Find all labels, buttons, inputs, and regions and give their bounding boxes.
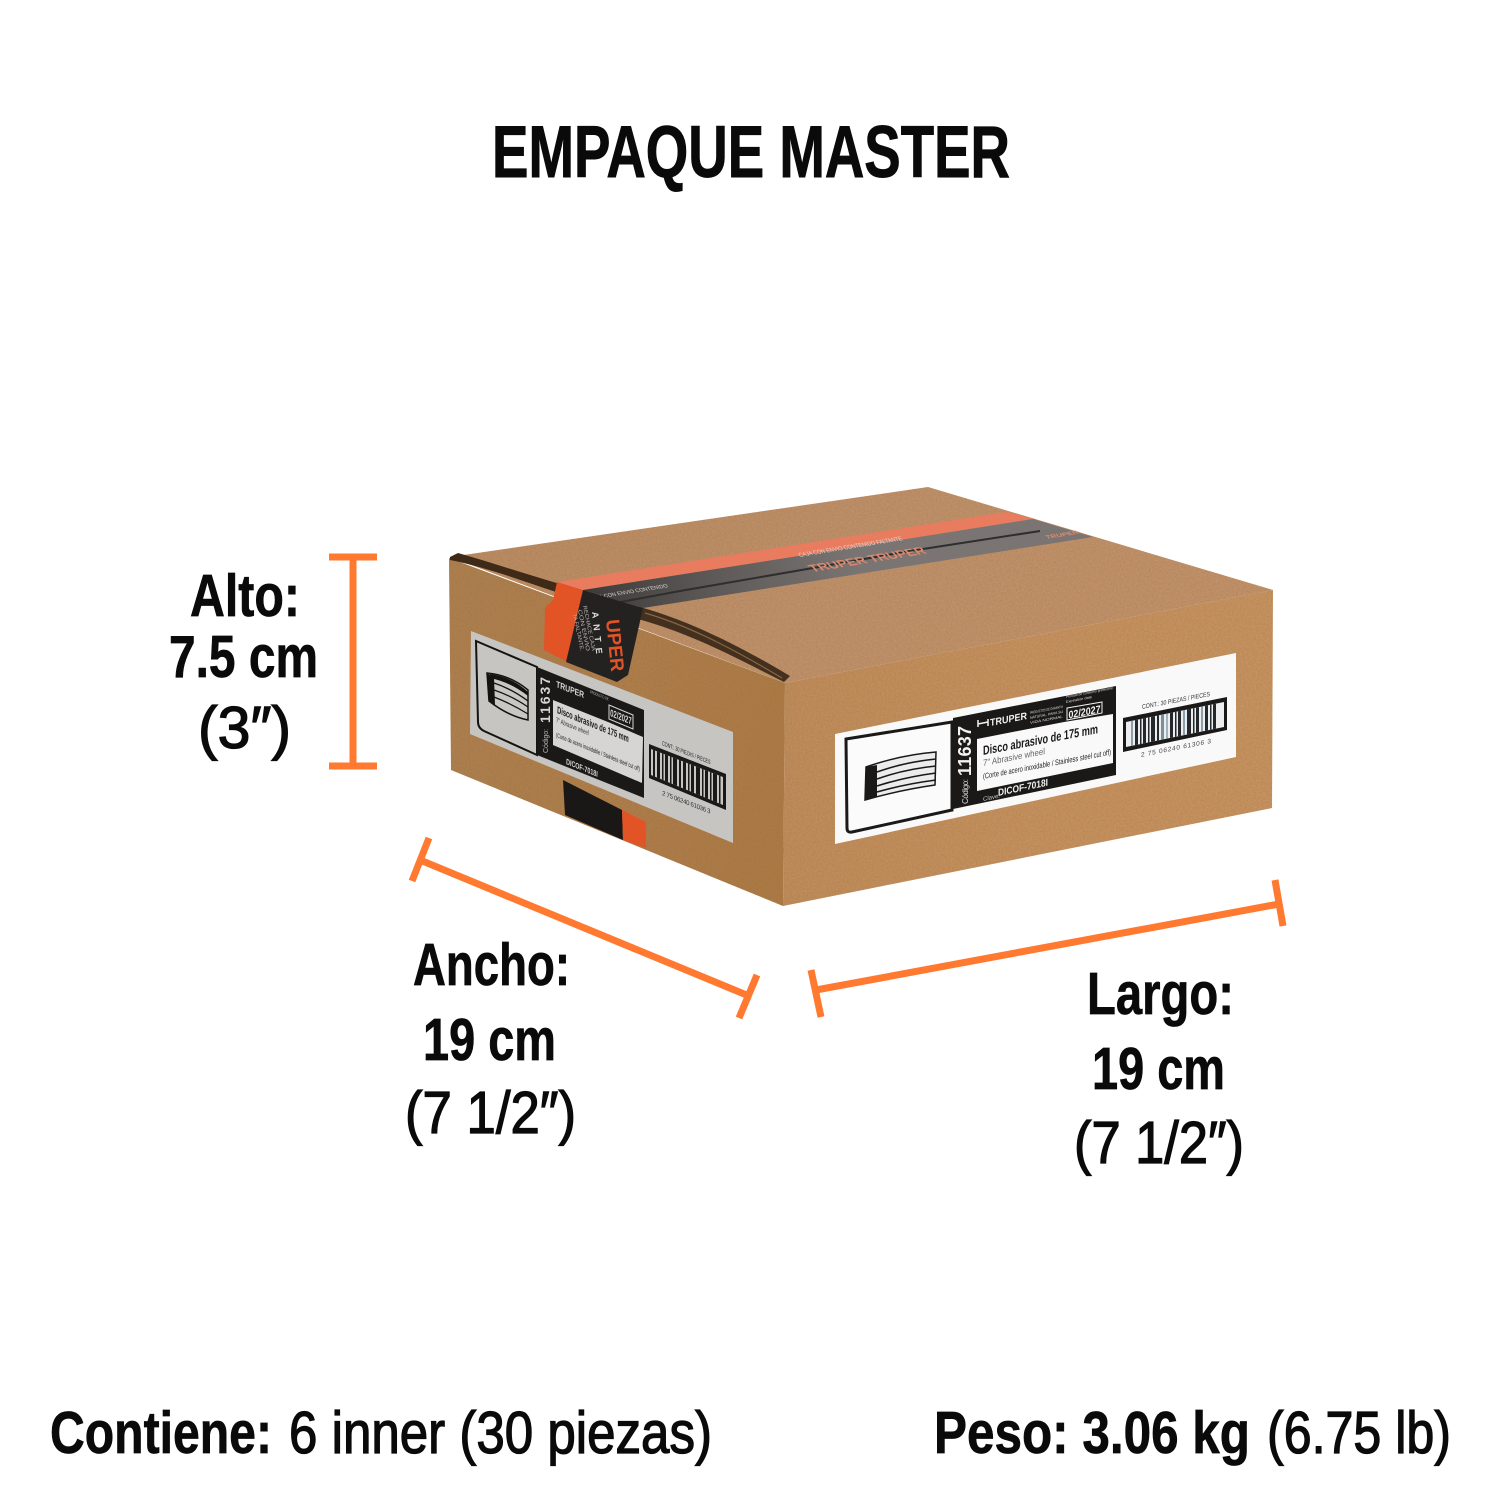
date box (609, 705, 633, 729)
height label (169, 563, 318, 761)
brand: TRUPER (990, 711, 1028, 729)
clave: DICOF-7018I (566, 757, 598, 779)
width dimension bracket (412, 838, 757, 1018)
flap seam left (450, 553, 560, 592)
date: 02/2027 (1068, 703, 1101, 721)
contents note: Contiene: (50, 1400, 272, 1466)
barcode digits: 2 75 06240 61306 3 (1141, 738, 1211, 759)
tape crease (610, 531, 1040, 604)
title: EMPAQUE MASTER (492, 112, 1010, 193)
weight note: Peso: 3.06 kg (934, 1400, 1250, 1466)
width label (405, 932, 576, 1146)
product picture frame (846, 722, 952, 832)
code number: 11637 (537, 677, 553, 723)
date: 02/2027 (610, 708, 632, 728)
truper logo mark (978, 719, 988, 727)
length label: 19 cm (1092, 1036, 1225, 1102)
top tape text: CAJA CON ENVIO CONTENIDO FALTANTE (797, 535, 904, 559)
top tape text: TRUPER TRUPER (806, 545, 931, 575)
height label: Alto: (190, 563, 300, 629)
contents note: 6 inner (30 piezas) (289, 1400, 712, 1466)
clave: DICOF-7018I (998, 778, 1048, 799)
left face tape: black part: UPER (601, 618, 627, 673)
top tape: grey band (583, 519, 1093, 608)
box right face (783, 590, 1273, 906)
top tape text (588, 530, 1080, 602)
english name: 7" Abrasive wheel (556, 717, 589, 737)
top tape: salmon band (557, 512, 1033, 590)
left face tape: black part (566, 590, 643, 682)
product name: Disco abrasivo de 175 mm (983, 721, 1098, 758)
disc stack icon (865, 752, 936, 800)
length label: (7 1/2″) (1074, 1110, 1244, 1176)
box left face (449, 558, 785, 906)
small print: Periodo de consumo preferente (1066, 686, 1113, 699)
brand: TRUPER (556, 679, 585, 700)
white box (553, 700, 643, 783)
flap seam right (630, 607, 790, 682)
contents: CONT.: 30 PIEZAS / PIECES (662, 741, 711, 766)
small print (1030, 686, 1113, 725)
box top face (450, 487, 1273, 683)
height dimension bracket (329, 554, 377, 768)
top tape text: TRUPER (1045, 530, 1080, 540)
length dimension bracket (811, 880, 1283, 1017)
codigo caption: Código: (961, 779, 970, 804)
left face tape: black part: ANTE (590, 611, 604, 654)
width label: Ancho: (413, 932, 570, 998)
description: (Corte de acero inoxidable / Stainless steel cut off) (983, 748, 1111, 781)
length label (1074, 961, 1244, 1176)
barcode (1123, 697, 1227, 752)
contents: CONT.: 30 PIEZAS / PIECES (1142, 691, 1211, 711)
barcode digits: 2 75 06240 61036 3 (662, 790, 711, 816)
weight note: (6.75 lb) (1267, 1400, 1451, 1466)
clave caption: Clave: (983, 793, 1000, 803)
code number: 11637 (955, 726, 975, 776)
description: (Corte de acero inoxidable / Stainless steel cut off) (556, 732, 640, 773)
top tape text: CAJA CON ENVIO CONTENIDO (588, 583, 669, 602)
disc stack icon (487, 673, 528, 720)
left face tape: black part: RECHACE CAJA (581, 605, 596, 652)
left label (470, 631, 733, 843)
contents note (50, 1400, 712, 1466)
width label: (7 1/2″) (405, 1080, 576, 1146)
right label (835, 653, 1236, 844)
small print: VIDA NORMAL (1030, 715, 1063, 725)
bottom tape: orange (622, 810, 646, 848)
flap edge highlight (645, 613, 782, 678)
small print: PRODUCTO DE (590, 689, 609, 701)
small print: PRODUCTOS DE GARANTIA (1030, 705, 1063, 715)
codigo caption: Código: (543, 729, 550, 753)
small print: NATURAL, PARA SU (1030, 710, 1063, 720)
length label: Largo: (1087, 961, 1234, 1027)
left face tape: orange part (544, 582, 583, 662)
barcode (649, 744, 726, 810)
date box (1067, 702, 1102, 720)
black data band (537, 667, 644, 798)
product name: Disco abrasivo de 175 mm (557, 705, 629, 745)
product picture frame (476, 641, 537, 755)
width label: 19 cm (423, 1007, 556, 1073)
white box (977, 714, 1113, 791)
english name: 7" Abrasive wheel (983, 746, 1045, 768)
left face tape: black part: TA FALTANTE. (571, 613, 585, 652)
height label: (3″) (198, 695, 291, 761)
cardboard box illustration (449, 487, 1273, 906)
left face tape: black part: CON ENVIO (576, 609, 591, 653)
bottom tape: black (563, 780, 623, 840)
small print: Expiration date (1066, 695, 1092, 704)
height label: 7.5 cm (169, 624, 318, 690)
black data band (953, 686, 1116, 809)
